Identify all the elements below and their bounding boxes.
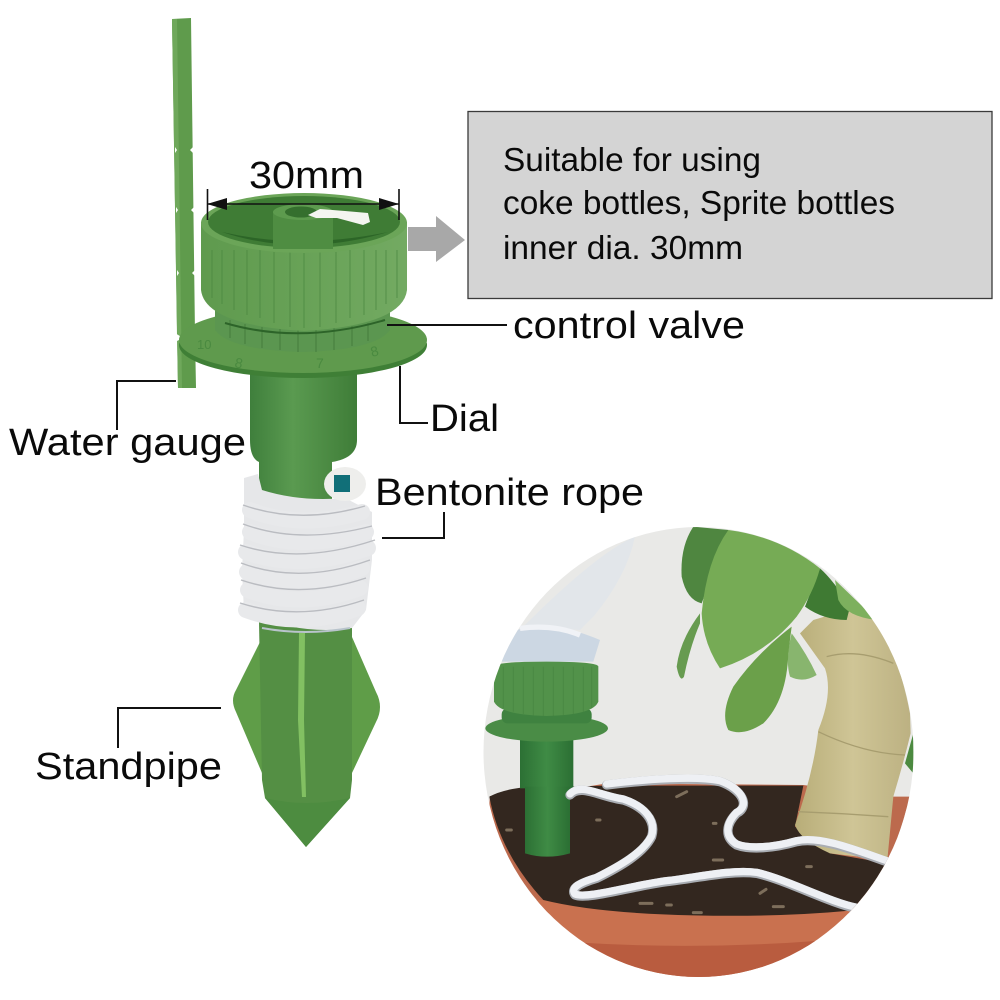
icon: dial disc: 7 — [316, 355, 324, 371]
spike ring and cap in soil — [494, 662, 598, 723]
dimension line: 30mm — [207, 155, 399, 220]
icon: upper stem — [250, 365, 357, 500]
leaves — [677, 527, 913, 773]
label: bentonite rope: Bentonite rope — [375, 472, 644, 514]
rope on soil — [570, 778, 887, 908]
icon: water gauge strip — [172, 18, 196, 388]
label: water gauge — [9, 381, 246, 464]
icon: standpipe spike — [233, 622, 380, 847]
icon: flower pot — [480, 783, 920, 980]
icon: bentonite rope coil — [240, 467, 375, 632]
icon: bottle cap — [201, 193, 407, 331]
icon: control valve ring — [215, 305, 390, 352]
arrow: to callout — [408, 216, 465, 262]
callout: bottle compatibility: Suitable for using — [503, 141, 761, 178]
spike dial in soil — [485, 719, 608, 742]
callout: bottle compatibility: coke bottles, Sprite bottles — [503, 184, 895, 221]
icon: dial disc — [179, 307, 427, 378]
icon: dial disc: 10 — [197, 337, 211, 352]
label: dial — [400, 366, 499, 440]
label: bentonite rope — [375, 472, 644, 538]
label: dial: Dial — [430, 398, 499, 440]
icon: dial disc: 8 — [369, 342, 381, 360]
icon: dial disc: 8 — [233, 354, 245, 372]
label: standpipe — [35, 708, 222, 788]
label: water gauge: Water gauge — [9, 422, 246, 464]
trunk rings — [798, 654, 905, 817]
callout: bottle compatibility: inner dia. 30mm — [503, 229, 743, 266]
trunk — [795, 610, 911, 860]
callout: bottle compatibility — [468, 112, 992, 298]
soil — [489, 786, 887, 916]
label: standpipe: Standpipe — [35, 746, 222, 788]
bottle — [502, 537, 635, 662]
dimension line: 30mm: 30mm — [249, 155, 364, 197]
photo: potted plant with installed spike — [480, 520, 920, 980]
label: control valve: control valve — [513, 305, 745, 347]
spike stem in soil — [520, 738, 573, 857]
soil specks — [507, 792, 811, 913]
